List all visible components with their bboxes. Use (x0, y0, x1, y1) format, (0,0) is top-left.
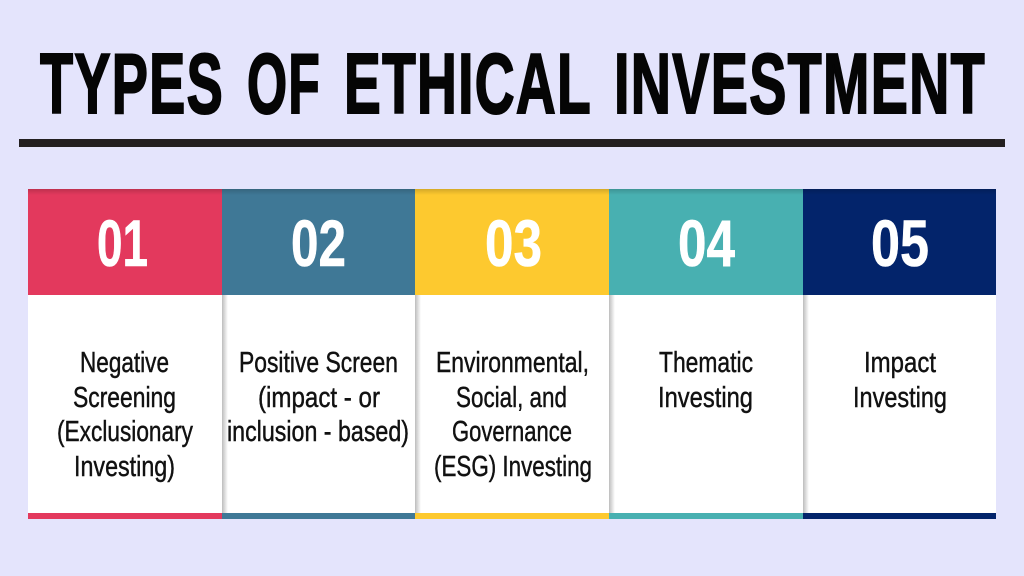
bottom bar (415, 513, 609, 519)
bottom bar (803, 513, 996, 519)
text: Thematic Investing (658, 347, 753, 414)
text: Positive Screen (227, 347, 409, 448)
number 04: 04 (678, 206, 735, 280)
text: Negative Screening: Screening (73, 382, 176, 414)
text: Positive Screen: inclusion - based) (227, 416, 409, 448)
panel: 05 Impact Investing (803, 189, 996, 519)
panel: 04 Thematic Investing (609, 189, 803, 519)
text: Impact Investing: Impact (864, 347, 936, 379)
header: 05 (803, 189, 996, 295)
bottom bar (28, 513, 222, 519)
title (40, 37, 986, 132)
title: ETHICAL (344, 37, 592, 132)
text: Negative Screening (57, 347, 193, 483)
header: 01 (28, 189, 222, 295)
text: Negative Screening: (Exclusionary (57, 416, 193, 448)
bottom bar (222, 513, 415, 519)
header: 03 (415, 189, 609, 295)
text: ESG Investing (434, 347, 592, 483)
text: Positive Screen: Positive Screen (239, 347, 398, 379)
header: 02 (222, 189, 415, 295)
number 02: 02 (291, 206, 346, 280)
text: ESG Investing: Environmental, (436, 347, 589, 379)
panel: 03 ESG Investing (415, 189, 609, 519)
header: 04 (609, 189, 803, 295)
panel: 01 Negative Screening (28, 189, 222, 519)
title: OF (247, 37, 321, 132)
text: Negative Screening: Negative (80, 347, 169, 379)
bottom bar (609, 513, 803, 519)
text: Positive Screen: (impact - or (258, 382, 380, 414)
text: ESG Investing: (ESG) Investing (434, 451, 592, 483)
title divider line (19, 139, 1005, 147)
panel: 02 Positive Screen (222, 189, 415, 519)
title: TYPES (40, 37, 224, 132)
number 03: 03 (485, 206, 542, 280)
text: Impact Investing: Investing (853, 382, 947, 414)
number 05: 05 (871, 206, 929, 280)
text: Negative Screening: Investing) (74, 451, 175, 483)
text: ESG Investing: Social, and (456, 382, 567, 414)
text: Thematic Investing: Thematic (659, 347, 753, 379)
text: Thematic Investing: Investing (658, 382, 753, 414)
text: Impact Investing (853, 347, 947, 414)
text: ESG Investing: Governance (452, 416, 572, 448)
number 01: 01 (97, 206, 148, 280)
